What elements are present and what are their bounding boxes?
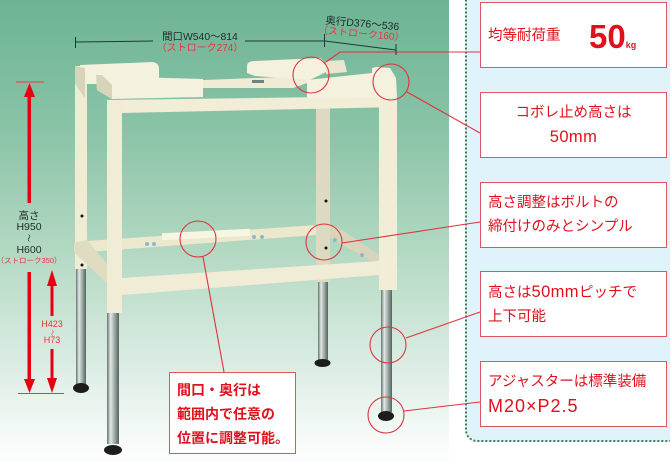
leader circles and lines [180,52,480,433]
height arrows [16,82,64,394]
load label: 均等耐荷重 [488,28,560,44]
overall height label: H600 [16,244,42,256]
overall height label: ～ [24,234,33,242]
callout: pitch [480,271,667,337]
leg height label: ～ [48,330,54,336]
callout: width and depth adjustment [169,372,296,454]
rack frame [74,66,397,313]
callout: height adjustment: 締付けのみとシンプル [488,219,633,235]
width and depth dimension lines [76,34,396,55]
callout: width and depth adjustment: 間口・奥行は [177,382,261,398]
callout: adjuster [480,361,667,427]
overall height label [0,209,62,265]
depth label: 奥行D376～536 [325,14,400,33]
leg height label: H73 [44,335,60,345]
callout: height adjustment [480,182,667,248]
callout: adjuster: アジャスターは標準装備 [488,374,646,390]
callout: height adjustment: 高さ調整はボルトの [488,195,618,211]
callout: width and depth adjustment: 位置に調整可能。 [177,430,289,446]
side panel [465,0,670,442]
legs [73,250,394,455]
width label: 間口W540～814 [162,31,238,43]
sliding trays [75,58,397,240]
leg height label [41,319,63,345]
depth stroke label: （ストローク160） [318,24,405,44]
background gradient [0,0,449,462]
leg height label: H423 [41,319,63,329]
callout: width and depth adjustment: 範囲内で任意の [177,406,275,422]
callout: load capacity [480,2,667,68]
callout: pitch: 高さは50mmピッチで [488,283,637,301]
bolts [80,200,364,266]
overall height label: 高さ [18,209,40,222]
overall height label: H950 [16,221,42,233]
callout: adjuster: M20×P2.5 [488,396,579,416]
callout: pitch: 上下可能 [488,309,546,325]
callout: spill guard [480,92,667,158]
load value: 50kg [589,18,636,55]
width stroke label: （ストローク274） [157,42,243,54]
callout: spill guard: 50mm [550,128,597,146]
callout: spill guard: コボレ止め高さは [516,105,632,121]
